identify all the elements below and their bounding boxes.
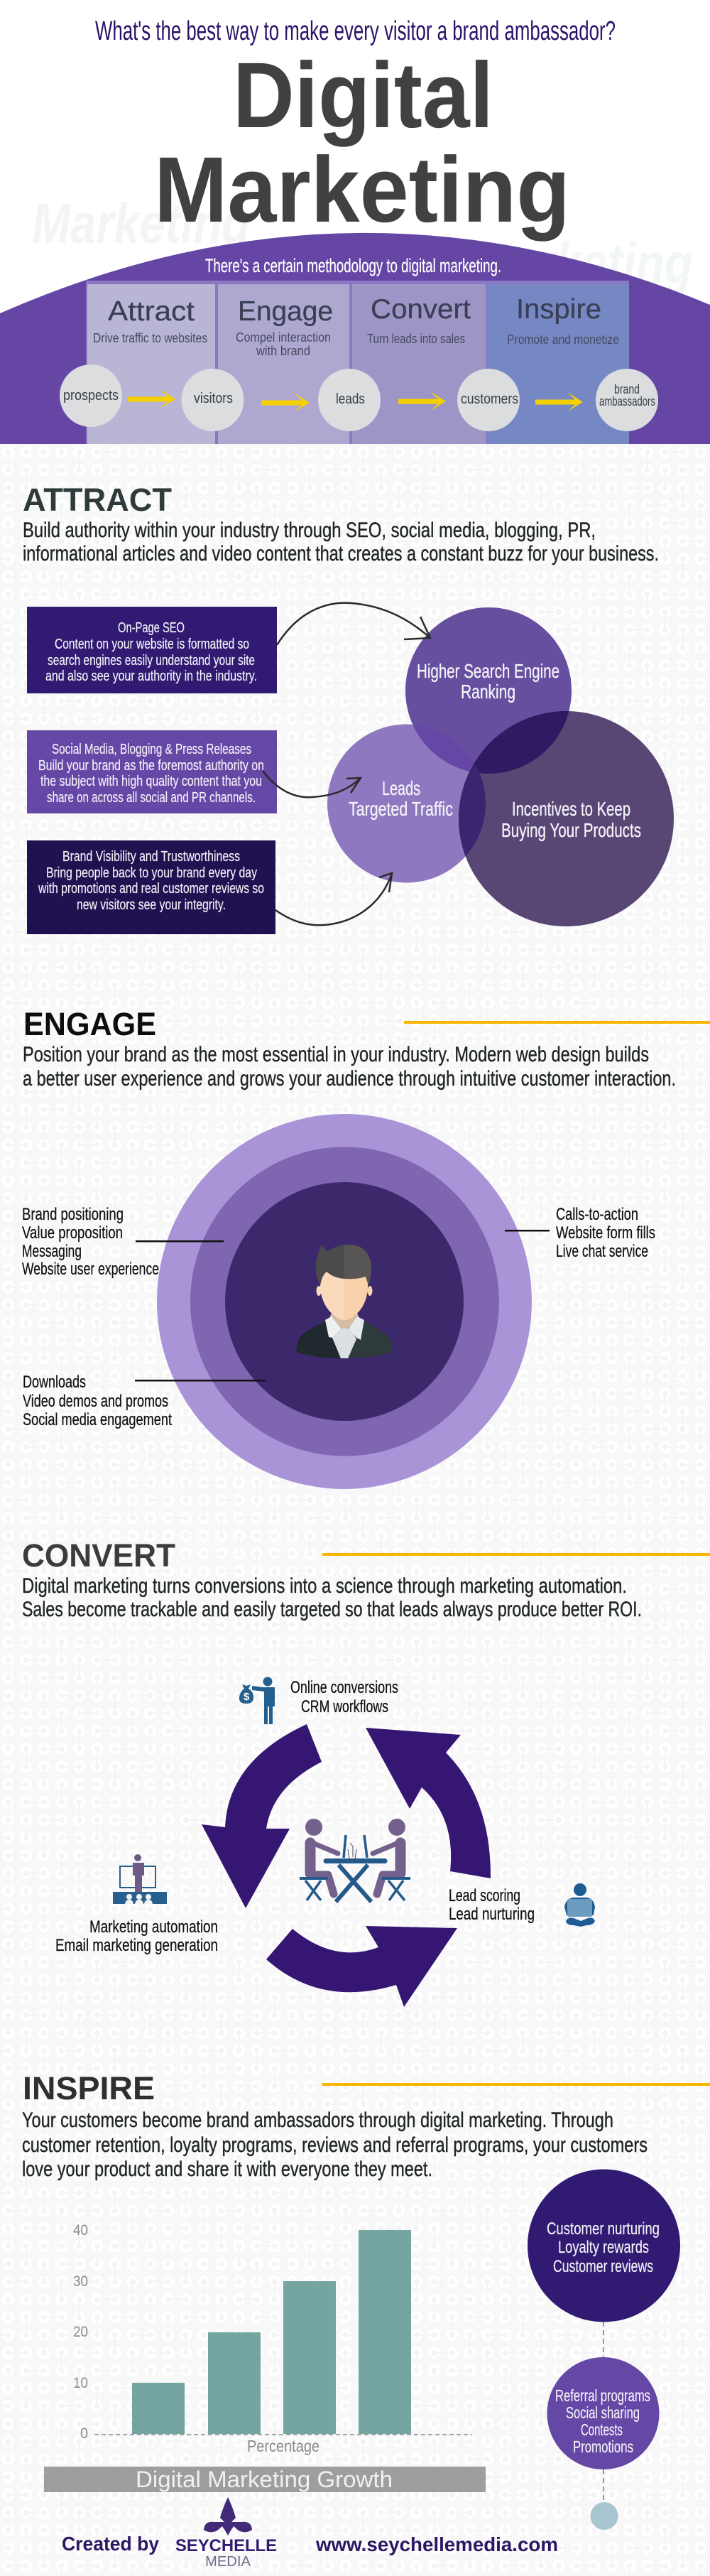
cycle arrow: bottom — [266, 1926, 457, 2007]
box: brand visibility: Bring people back to your brand every day — [46, 865, 257, 881]
column: convert: Convert — [371, 294, 471, 325]
logo name — [175, 2536, 277, 2570]
venn label: leads: Leads — [382, 777, 420, 799]
section: attract — [23, 482, 674, 934]
column: inspire — [488, 284, 629, 444]
box: brand visibility: with promotions and real customer reviews so — [38, 881, 264, 897]
node: brand ambassadors: ambassadors — [599, 394, 655, 408]
box: on-page seo: On-Page SEO — [118, 620, 185, 636]
heading: inspire: INSPIRE — [23, 2070, 155, 2106]
label: lead scoring: Lead scoring — [449, 1886, 520, 1905]
box: brand visibility: Brand Visibility and Trustworthiness — [62, 849, 240, 865]
label: downloads: Social media engagement — [23, 1410, 172, 1429]
column: engage: Compel interaction — [236, 330, 331, 345]
icon: money bag person: $ — [244, 1691, 250, 1703]
box: social media: Build your brand as the foremost authority on — [38, 758, 264, 774]
node: visitors: visitors — [194, 391, 233, 406]
section: inspire — [22, 2070, 710, 2530]
chart title banner — [44, 2467, 486, 2492]
node: customers — [457, 369, 520, 431]
methodology subtitle: There's a certain methodology to digital marketing. — [205, 255, 501, 276]
label: downloads — [23, 1373, 172, 1429]
box: social media: Social Media, Blogging & Press Releases — [52, 742, 251, 757]
venn label: ranking: Ranking — [461, 681, 515, 703]
chart title banner: Digital Marketing Growth — [136, 2467, 393, 2492]
circle: customer nurturing: Customer nurturing — [547, 2219, 660, 2239]
column: attract — [87, 284, 215, 444]
arrow: leads to customers — [398, 391, 446, 411]
label: lead scoring: Lead nurturing — [449, 1905, 535, 1924]
arrow: social to leads — [263, 771, 361, 797]
label: calls to action: Calls-to-action — [556, 1205, 638, 1224]
label: brand positioning: Website user experience — [22, 1260, 159, 1279]
icon: money bag person — [239, 1677, 275, 1724]
footer — [62, 2497, 558, 2570]
y axis labels: 0 — [80, 2425, 88, 2442]
box: brand visibility — [27, 840, 275, 934]
box: on-page seo — [27, 607, 277, 693]
bar chart — [73, 2222, 472, 2455]
column: engage: with brand — [256, 344, 310, 358]
column: attract: Drive traffic to websites — [93, 331, 207, 345]
section: engage — [22, 1006, 710, 1489]
box: on-page seo: Content on your website is formatted so — [55, 637, 249, 652]
box: on-page seo: search engines easily understand your site — [48, 653, 255, 669]
label: brand positioning: Brand positioning — [22, 1205, 124, 1224]
venn label: leads — [349, 777, 453, 820]
circle: customer nurturing: Customer reviews — [553, 2257, 653, 2276]
column: engage: Engage — [238, 296, 333, 327]
arrow: prospects to visitors — [128, 389, 175, 408]
label: online conversions: CRM workflows — [301, 1697, 388, 1716]
section: convert — [22, 1537, 710, 2007]
label: brand positioning — [22, 1205, 159, 1279]
inspire intro text — [22, 2109, 648, 2181]
column: inspire: Promote and monetize — [507, 332, 619, 347]
label: downloads: Downloads — [23, 1373, 86, 1392]
venn label: incentives: Buying Your Products — [501, 819, 641, 841]
y axis labels: 40 — [73, 2222, 88, 2239]
node: brand ambassadors: brand — [614, 382, 640, 396]
heading: engage: ENGAGE — [23, 1006, 156, 1042]
logo name: MEDIA — [205, 2554, 251, 2570]
logo name: SEYCHELLE — [175, 2536, 277, 2555]
venn label: incentives: Incentives to Keep — [512, 798, 630, 820]
label: marketing automation: Marketing automation — [89, 1917, 218, 1937]
concentric circles — [157, 1114, 532, 1489]
venn label: leads: Targeted Traffic — [349, 798, 453, 820]
arrow: visitors to leads — [261, 393, 310, 412]
heading: attract: ATTRACT — [23, 482, 172, 518]
panel: methodology arc — [0, 233, 710, 444]
engage intro text — [23, 1043, 676, 1091]
circle: end dot — [591, 2502, 618, 2530]
column: convert — [352, 284, 486, 444]
arrow: visibility to leads — [275, 873, 392, 925]
y axis labels: 10 — [73, 2375, 88, 2391]
node: brand ambassadors — [596, 369, 658, 431]
website: www.seychellemedia.com — [315, 2533, 558, 2555]
venn diagram — [327, 607, 674, 926]
arrow: seo to ranking — [277, 603, 430, 645]
y axis labels: 30 — [73, 2273, 88, 2290]
node: visitors — [182, 369, 244, 431]
attract intro text — [23, 519, 659, 565]
column: attract: Attract — [108, 296, 195, 327]
node: prospects: prospects — [63, 388, 119, 404]
circle: customer nurturing: Loyalty rewards — [558, 2238, 649, 2257]
node: customers: customers — [461, 391, 518, 407]
venn label: ranking: Higher Search Engine — [417, 660, 559, 682]
cycle arrow: left — [202, 1724, 322, 1908]
label: marketing automation — [55, 1917, 218, 1955]
icon: presenter on stage — [113, 1854, 167, 1904]
box: on-page seo: and also see your authority in the industry. — [45, 669, 257, 684]
box: social media: the subject with high quality content that you — [40, 774, 262, 789]
bars — [132, 2230, 411, 2434]
label: marketing automation: Email marketing generation — [55, 1936, 218, 1955]
box: brand visibility: new visitors see your integrity. — [77, 897, 226, 913]
node: leads: leads — [336, 391, 365, 407]
venn label: ranking — [417, 660, 559, 703]
column: engage — [218, 284, 349, 444]
main title — [154, 43, 570, 242]
box: social media — [27, 730, 277, 813]
circle: customer nurturing — [528, 2170, 680, 2322]
label: calls to action: Website form fills — [556, 1223, 655, 1243]
main title: Digital — [233, 43, 493, 147]
label: brand positioning: Value proposition — [22, 1223, 123, 1243]
y axis labels: 20 — [73, 2324, 88, 2340]
venn label: incentives — [501, 798, 641, 841]
circle: referral programs: Contests — [581, 2420, 623, 2439]
circle: referral programs: Referral programs — [555, 2386, 650, 2405]
icon: fleur de lis logo — [204, 2497, 252, 2536]
circle: referral programs: Social sharing — [566, 2403, 640, 2422]
heading: convert: CONVERT — [22, 1537, 175, 1574]
node: leads — [318, 369, 381, 431]
label: online conversions: Online conversions — [290, 1678, 398, 1697]
column frame — [86, 281, 629, 444]
created by: Created by — [62, 2533, 159, 2555]
arrow: customers to ambassadors — [535, 392, 583, 411]
watermark left: Marketing — [32, 192, 250, 255]
circle: referral programs — [547, 2357, 659, 2469]
label: online conversions — [290, 1678, 398, 1716]
label: downloads: Video demos and promos — [23, 1392, 168, 1411]
icon: person — [296, 1245, 393, 1358]
icon: person with laptop — [564, 1883, 595, 1927]
box: social media: share on across all social and PR channels. — [47, 790, 256, 806]
column: convert: Turn leads into sales — [367, 332, 465, 346]
icon: meeting at table — [300, 1819, 410, 1902]
label: calls to action — [556, 1205, 655, 1261]
label: lead scoring — [449, 1886, 535, 1924]
node: prospects — [60, 364, 122, 427]
column: inspire: Inspire — [516, 294, 601, 325]
inspire intro text: love your product and share it with everyone they meet. — [22, 2158, 432, 2181]
circle: referral programs: Promotions — [573, 2437, 633, 2456]
label: brand positioning: Messaging — [22, 1242, 82, 1261]
y axis labels — [73, 2222, 88, 2442]
convert intro text — [22, 1574, 642, 1621]
cycle arrow: right — [366, 1728, 491, 1878]
label: calls to action: Live chat service — [556, 1242, 648, 1261]
main title: Marketing — [154, 137, 570, 242]
x axis label: Percentage — [247, 2437, 320, 2455]
